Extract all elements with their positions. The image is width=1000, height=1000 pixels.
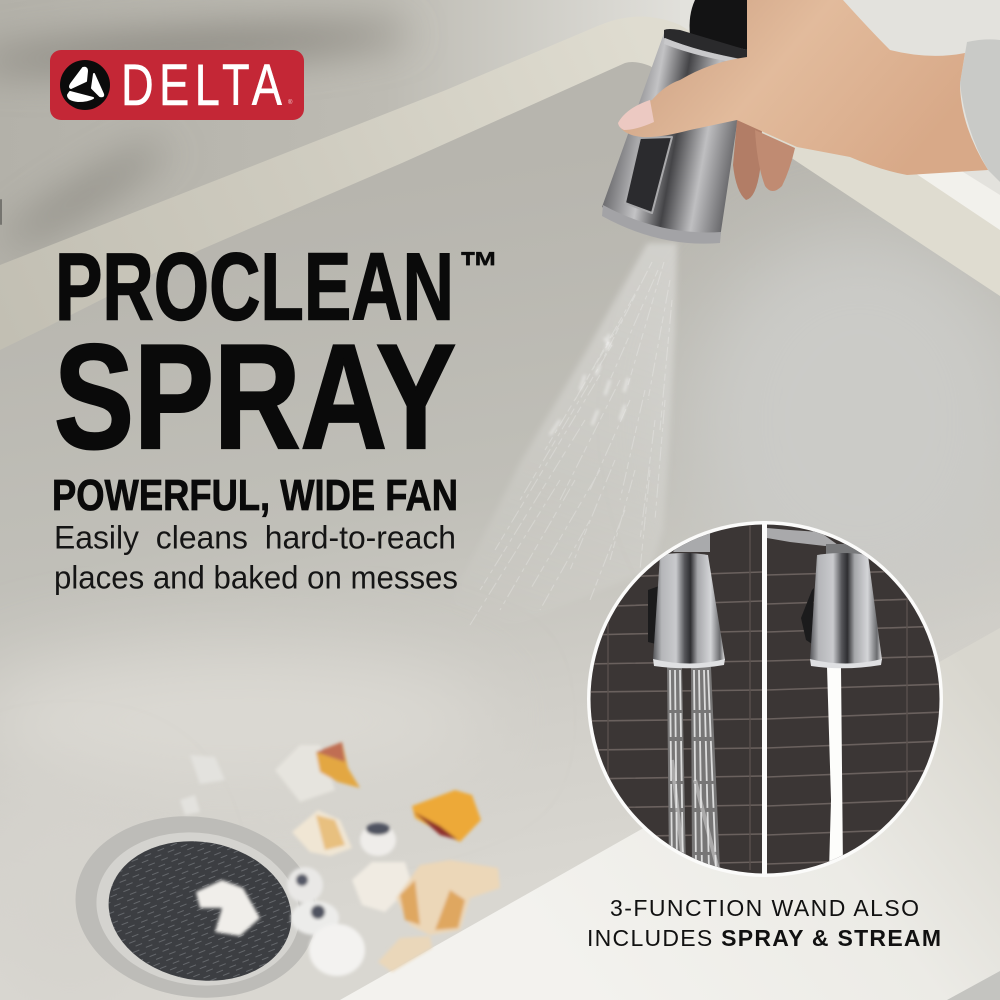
spray wand (602, 0, 747, 244)
faucet edge (0, 199, 2, 225)
description (54, 520, 458, 596)
right stream (827, 667, 843, 870)
left faucet connector (673, 534, 710, 552)
right spray head (801, 553, 882, 668)
subheading: POWERFUL, WIDE FAN (52, 471, 458, 520)
center divider (762, 521, 767, 877)
countertop top right (688, 0, 1000, 195)
caption (587, 895, 941, 951)
sink rim (0, 16, 1000, 350)
drain (64, 801, 328, 1000)
sleeve (960, 39, 1000, 182)
logo red badge (50, 50, 304, 120)
drain flange (64, 801, 328, 1000)
left spray head (648, 553, 725, 668)
logo: Delta (50, 50, 304, 120)
logo: Delta: ® (288, 99, 293, 106)
left spray pattern (667, 667, 720, 870)
white ring (587, 521, 943, 877)
spray droplet highlights (550, 334, 628, 435)
description: places and baked on messes (54, 560, 458, 596)
tile backdrop (585, 520, 945, 880)
caption: 3-FUNCTION WAND ALSO (610, 895, 919, 921)
food scraps (180, 742, 500, 976)
drain opening (97, 827, 303, 995)
wand base ring (602, 205, 721, 244)
hand (618, 0, 988, 200)
countertop shadows (0, 17, 411, 255)
comparison circle (585, 520, 945, 880)
water spray fan (453, 243, 677, 650)
wand black hose connector (690, 0, 747, 50)
wand button panel (625, 137, 672, 213)
thumbnail (618, 100, 654, 130)
right faucet connector (767, 528, 838, 546)
logo wordmark: DELTA (121, 54, 287, 118)
description: Easily cleans hard-to-reach (54, 520, 456, 556)
countertop in front of the sink (340, 628, 1000, 1000)
basin shading (0, 221, 1000, 769)
food in drain (196, 880, 260, 936)
title: SPRAY (54, 313, 456, 480)
palm and thumb (618, 0, 988, 175)
middle finger (755, 130, 795, 191)
title: ™ (459, 243, 499, 290)
logo emblem (60, 60, 110, 110)
wand chrome body (602, 33, 747, 238)
caption: INCLUDES SPRAY & STREAM (587, 925, 941, 951)
title: PROCLEAN (55, 234, 454, 340)
index finger (733, 120, 762, 200)
title (54, 234, 499, 480)
countertop behind the sink (402, 0, 683, 106)
